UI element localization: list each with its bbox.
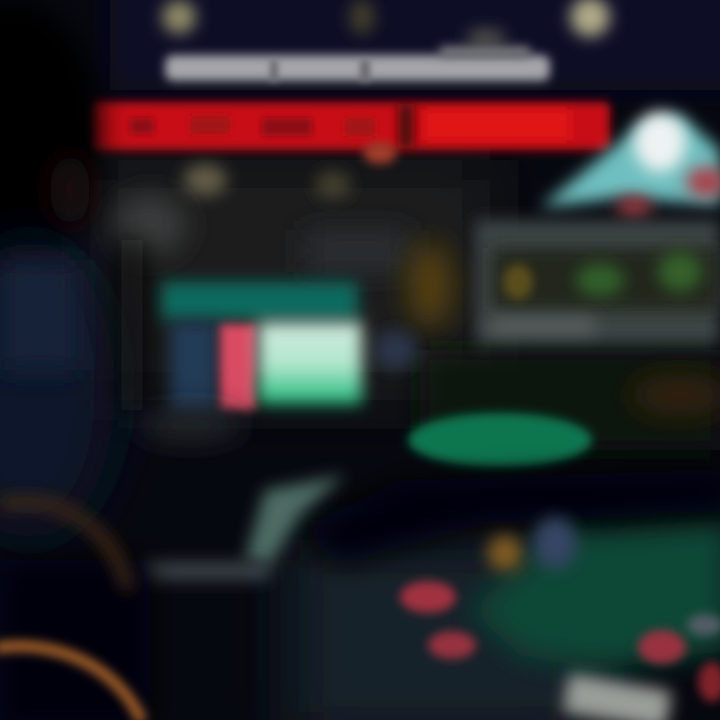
mid background machines <box>114 195 720 415</box>
ceiling lights <box>162 0 610 199</box>
foreground poker table <box>300 470 720 670</box>
screen with flag <box>160 282 362 412</box>
chair with wooden frame <box>0 502 150 720</box>
title line: white <box>165 46 550 82</box>
poker chips <box>400 581 720 720</box>
tent canopy <box>540 112 720 218</box>
green oval table <box>408 413 592 467</box>
silhouette of seated person <box>0 0 144 540</box>
desk and keyboard area <box>135 409 345 580</box>
slot machine panel <box>475 220 720 345</box>
title banner: red <box>92 102 610 164</box>
